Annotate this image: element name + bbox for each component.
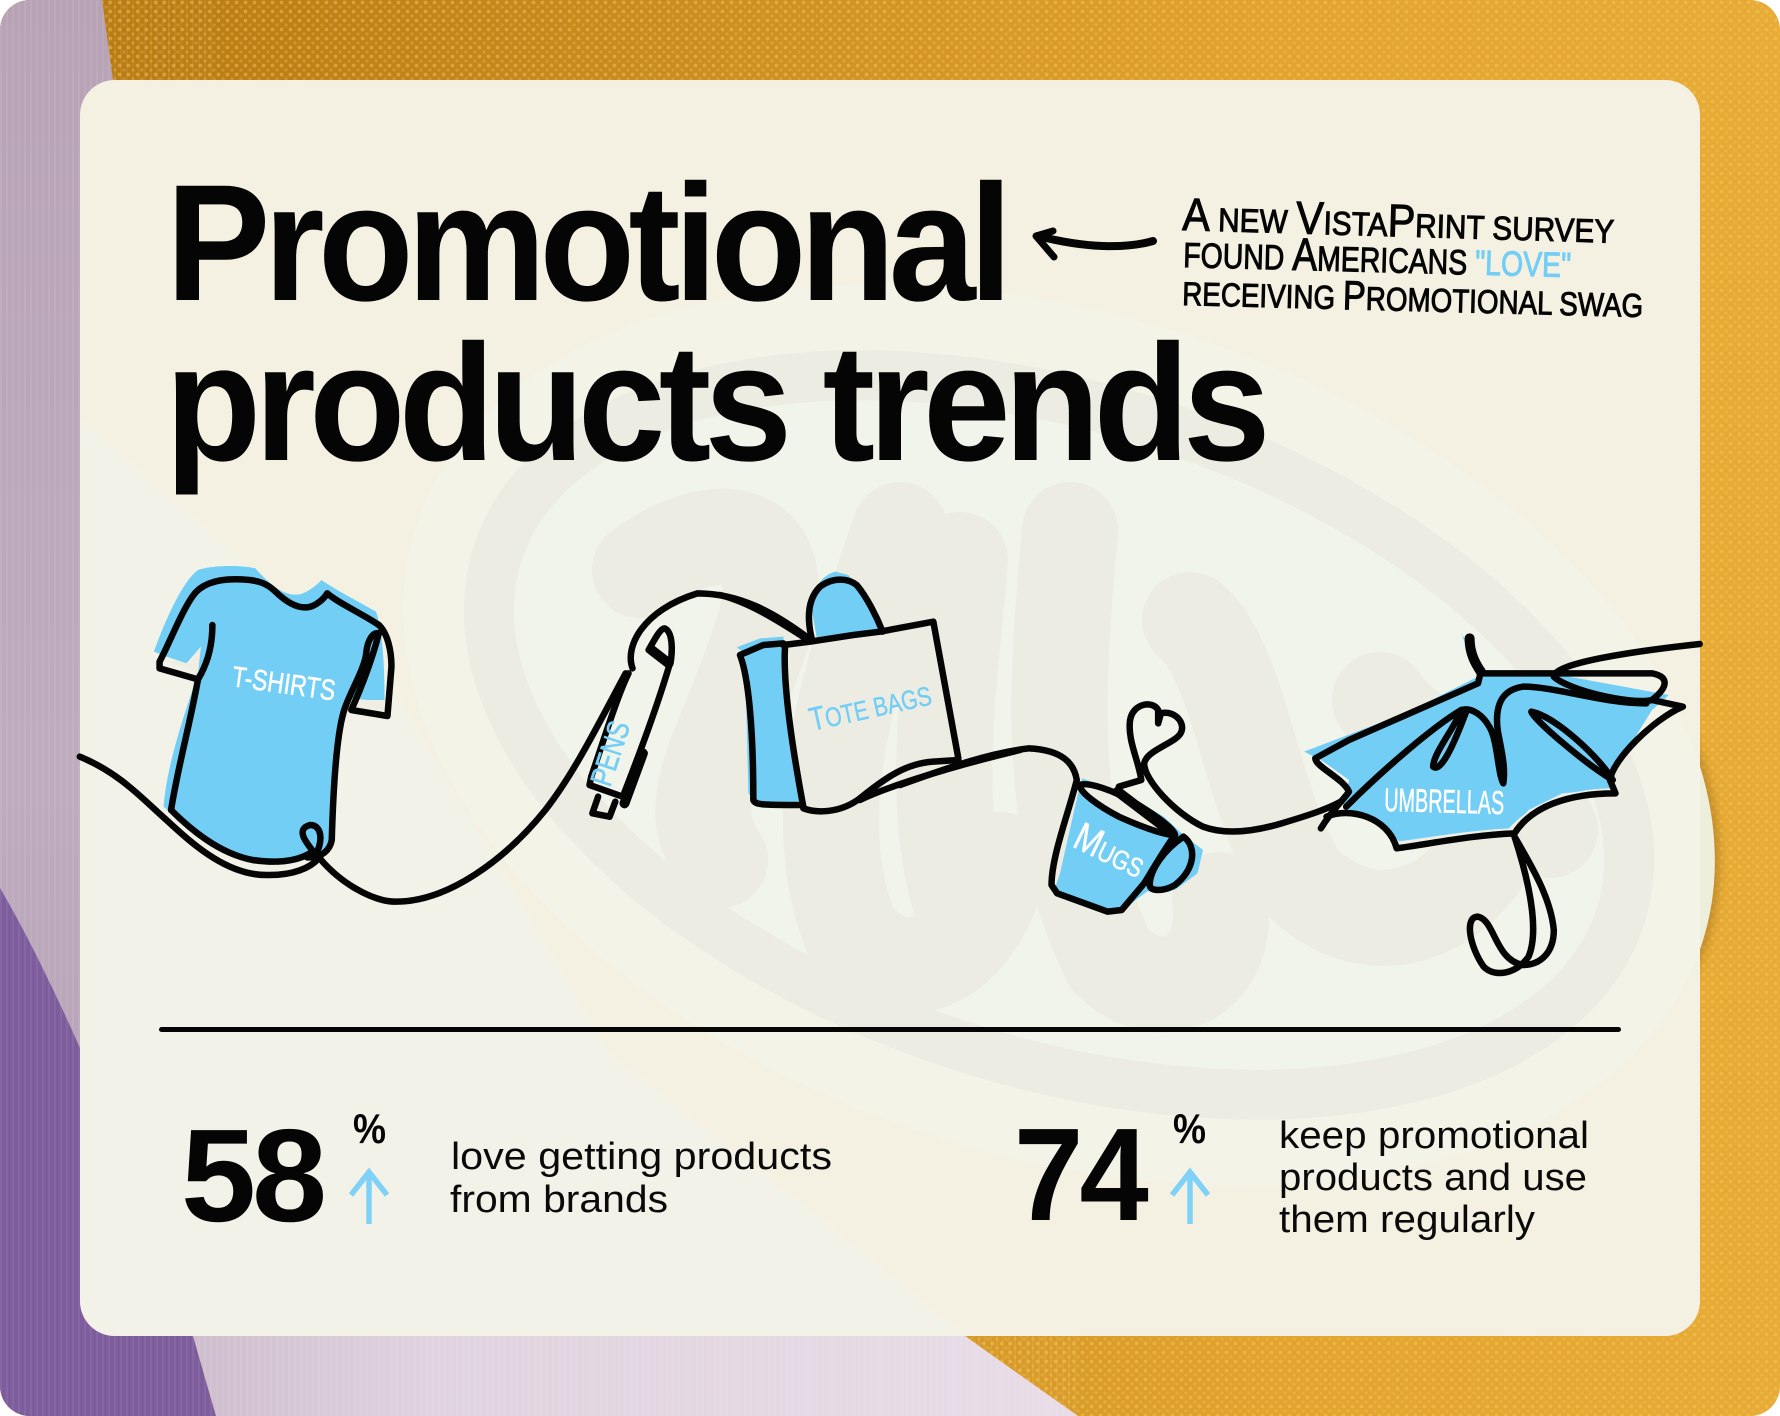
- wire from edge through pen: [80, 673, 626, 902]
- text: love getting products: [450, 1142, 830, 1212]
- number 74: 74: [1014, 1101, 1148, 1248]
- title: Promotional: [166, 151, 1006, 336]
- text: love getting products: love getting products: [451, 1136, 832, 1178]
- label: pens: PENS: [583, 717, 637, 790]
- number 58: 58: [181, 1102, 324, 1249]
- handwritten note: FOUND AMERICANS "LOVE": [1183, 225, 1572, 287]
- label: tote bags: TOTE BAGS: [806, 675, 935, 738]
- icon: up arrow: [351, 1172, 387, 1224]
- divider: [159, 1027, 1621, 1032]
- stat: 74 percent: [1019, 1114, 1586, 1240]
- label: mugs: MUGS: [1067, 815, 1153, 887]
- label: umbrellas: UMBRELLAS: [1384, 781, 1505, 821]
- icon: t-shirt: [154, 566, 391, 863]
- handwritten note: RECEIVING PROMOTIONAL SWAG: [1182, 268, 1644, 326]
- label: t-shirts: T-SHIRTS: [230, 661, 337, 707]
- text: keep promotional: [1279, 1115, 1589, 1241]
- percent sign: %: [1173, 1105, 1206, 1152]
- text: love getting products: from brands: [450, 1179, 668, 1221]
- icon: umbrella: [1304, 633, 1700, 973]
- handwritten note: A NEW VISTAPRINT SURVEY: [1182, 188, 1615, 253]
- icon: mug: [900, 704, 1349, 912]
- icon: pen: [583, 593, 806, 817]
- percent sign: %: [353, 1105, 386, 1152]
- icon: up arrow: [1172, 1172, 1208, 1224]
- stat: 58 percent: [185, 1114, 830, 1224]
- text: keep promotional: keep promotional: [1279, 1115, 1589, 1157]
- handwritten note: [1181, 198, 1642, 318]
- title: [165, 151, 1265, 496]
- icon: tote bag: [720, 572, 1020, 811]
- title: products trends: [165, 311, 1265, 496]
- text: keep promotional: them regularly: [1279, 1199, 1535, 1241]
- text: keep promotional: products and use: [1279, 1157, 1587, 1199]
- illustration: continuous line of products: [80, 566, 1700, 973]
- arrow pointing to title: [1036, 231, 1153, 257]
